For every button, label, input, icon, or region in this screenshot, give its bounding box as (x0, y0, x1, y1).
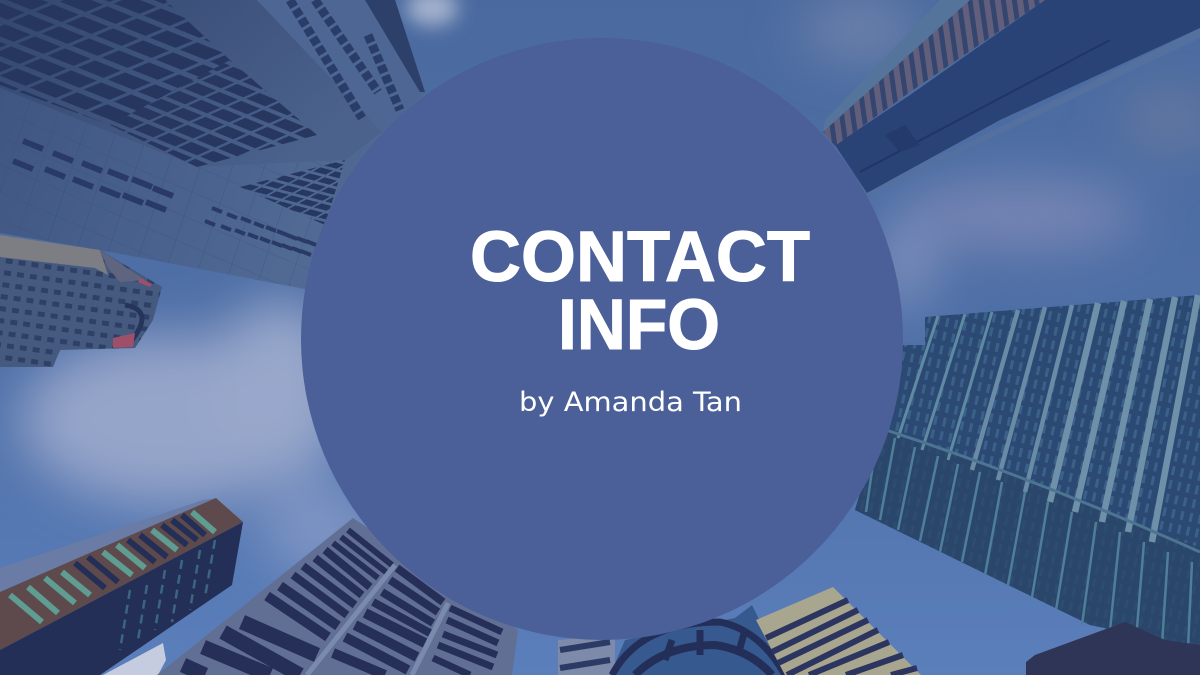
title: CONTACT (470, 218, 810, 297)
subtitle: by Amanda Tan (519, 387, 742, 418)
building: bottom centre-left tower (157, 518, 518, 675)
circle panel (301, 38, 903, 640)
building: bottom right dark block (1026, 622, 1200, 675)
title (470, 218, 810, 365)
building: bottom left tower (0, 498, 243, 675)
building: right glass tower (855, 295, 1200, 648)
building: left small tower (0, 235, 162, 367)
building: top right tower (823, 0, 1200, 196)
building: top left tower (0, 0, 425, 290)
title: INFO (558, 286, 720, 365)
building: bottom centre towers (558, 587, 921, 675)
